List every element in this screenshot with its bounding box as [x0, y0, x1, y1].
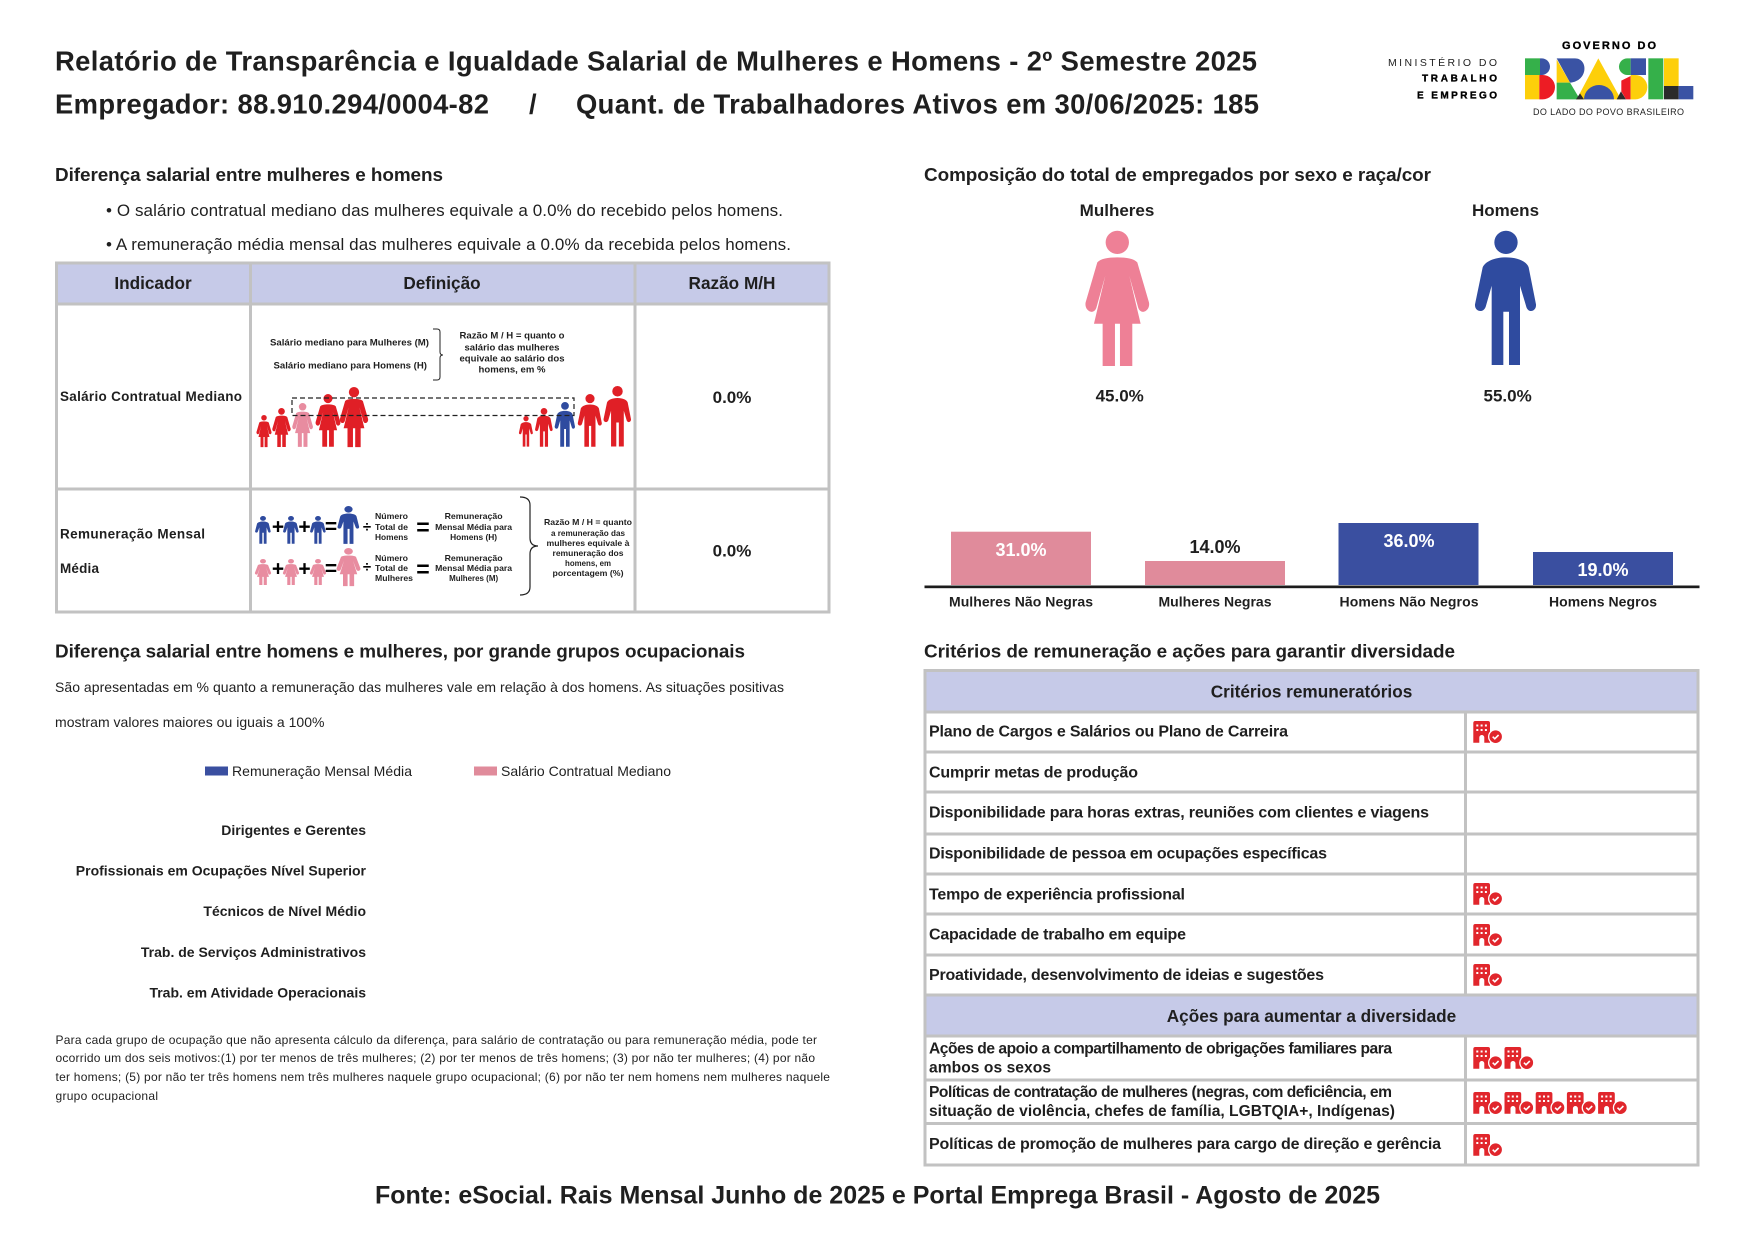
row: disponibilidade pessoa: Disponibilidade de pessoa em ocupações específicas [929, 846, 1327, 862]
footnote: Para cada grupo de ocupação que não apresenta cálculo da diferença, para salário de contratação ou para remuneração média, pode ter [56, 1033, 817, 1047]
category labels: Técnicos de Nível Médio [203, 903, 366, 919]
logo: ministério do trabalho e emprego [1388, 56, 1497, 102]
row: capacidade [925, 914, 1698, 955]
row: políticas de promoção [925, 1124, 1698, 1165]
table header: ações: Ações para aumentar a diversidade [1167, 1006, 1456, 1026]
figure: homens: Homens [1472, 201, 1539, 220]
panel: critérios de remuneração [924, 642, 1698, 1165]
diagram: remuneração média: Razão M / H = quanto [544, 517, 632, 527]
legend [205, 763, 671, 779]
logo: governo do brasil: DO LADO DO POVO BRASILEIRO [1533, 107, 1684, 117]
category labels: Trab. de Serviços Administrativos [141, 944, 366, 960]
table header: Indicador [114, 273, 192, 293]
diagram: salário mediano: homens, em % [478, 364, 546, 376]
diagram: remuneração média: = [325, 558, 337, 580]
diagram: salário mediano: salário das mulheres [464, 342, 560, 354]
row: ações de apoio: ambos os sexos [929, 1060, 1051, 1076]
row: cumprir metas [925, 752, 1698, 792]
figure: homens: 55.0% [1483, 386, 1532, 406]
row: plano de cargos [925, 712, 1698, 752]
panel: diferença salarial [55, 165, 829, 612]
footnote: grupo ocupacional [56, 1089, 158, 1103]
row: ações de apoio: Ações de apoio a compartilhamento de obrigações familiares para [929, 1040, 1392, 1058]
diagram: remuneração média [255, 497, 632, 595]
heading: critérios: Critérios de remuneração e ações para garantir diversidade [924, 642, 1455, 662]
heading: grupos ocupacionais: Diferença salarial entre homens e mulheres, por grande grupos ocupacionais [55, 642, 745, 662]
diagram: remuneração média: + [272, 516, 284, 538]
row: tempo de experiência: Tempo de experiência profissional [929, 886, 1185, 904]
description text [55, 679, 784, 730]
description text: mostram valores maiores ou iguais a 100% [55, 714, 324, 730]
bullet texts [106, 201, 791, 254]
row: políticas de contratação: Políticas de contratação de mulheres (negras, com deficiência, em [929, 1084, 1392, 1101]
diagram: remuneração média: Número [375, 511, 408, 521]
row: capacidade: Capacidade de trabalho em equipe [929, 926, 1186, 944]
diagram: remuneração média: Mulheres [375, 573, 413, 583]
heading: diferença salarial: Diferença salarial entre mulheres e homens [55, 165, 443, 186]
logo: ministério do trabalho e emprego: TRABALHO [1422, 74, 1497, 84]
panel: grupos ocupacionais [55, 642, 830, 1103]
diagram: remuneração média: Mensal Média para [435, 522, 512, 532]
diagram: remuneração média: Remuneração [445, 553, 503, 563]
category labels: Trab. em Atividade Operacionais [149, 984, 366, 1000]
diagram: remuneração média: porcentagem (%) [552, 568, 624, 578]
category labels: Dirigentes e Gerentes [221, 822, 366, 838]
table header: critérios remuneratórios [925, 670, 1698, 712]
legend: Salário Contratual Mediano [501, 763, 671, 779]
table header: Definição [403, 273, 481, 293]
row: tempo de experiência [925, 874, 1698, 914]
figure: homens [1472, 201, 1539, 406]
row: remuneração mensal média [56, 489, 829, 612]
bar chart: sexo e raça/cor [924, 523, 1700, 610]
diagram: remuneração média: remuneração dos [552, 548, 624, 558]
diagram: remuneração média: Total de [375, 522, 408, 532]
diagram: salário mediano: Razão M / H = quanto o [460, 330, 565, 342]
row: disponibilidade horas extras: Disponibilidade para horas extras, reuniões com clientes e viagens [929, 804, 1429, 822]
title: / [529, 89, 537, 120]
diagram: remuneração média: Número [375, 553, 408, 563]
logo: ministério do trabalho e emprego: E EMPREGO [1417, 90, 1497, 102]
row: salário contratual mediano: Salário Contratual Mediano [60, 389, 242, 404]
table: indicadores [56, 263, 829, 612]
diagram: salário mediano [256, 329, 631, 447]
row: ações de apoio [925, 1036, 1698, 1080]
footnote: ter homens; (5) por não ter três homens nem três mulheres naquele grupo ocupacional; (6) por não ter nem homens nem mulheres naquele [56, 1070, 830, 1084]
title: Quant. de Trabalhadores Ativos em 30/06/2025: 185 [576, 89, 1259, 120]
row: disponibilidade horas extras [925, 792, 1698, 834]
diagram: remuneração média: Homens [375, 532, 408, 542]
diagram: salário mediano: Salário mediano para Homens (H) [274, 360, 427, 372]
table header: Razão M/H [689, 273, 775, 293]
bar chart: sexo e raça/cor: Homens Não Negros [1340, 594, 1479, 610]
diagram: remuneração média: + [298, 516, 311, 538]
diagram: remuneração média: = [416, 514, 430, 540]
diagram: remuneração média: ÷ [363, 558, 371, 576]
diagram: remuneração média: Homens (H) [450, 532, 497, 542]
footnote [56, 1033, 830, 1103]
footnote: ocorrido um dos seis motivos:(1) por ter menos de três mulheres; (2) por ter menos de três homens; (3) por não ter mulheres; (4) por não [56, 1051, 815, 1065]
bar chart: sexo e raça/cor: Mulheres Não Negras [949, 594, 1093, 610]
figure: mulheres [1080, 201, 1154, 406]
title [55, 46, 1259, 120]
title: Relatório de Transparência e Igualdade Salarial de Mulheres e Homens - 2º Semestre 2025 [55, 46, 1257, 76]
legend: Remuneração Mensal Média [232, 763, 412, 779]
bar chart: sexo e raça/cor: 14.0% [1189, 537, 1241, 557]
diagram: remuneração média: + [298, 558, 311, 580]
figure: mulheres: 45.0% [1096, 386, 1144, 406]
row: políticas de contratação: situação de violência, chefes de família, LGBTQIA+, Indígenas) [929, 1103, 1395, 1120]
row: cumprir metas: Cumprir metas de produção [929, 764, 1138, 782]
diagram: remuneração média: Mulheres (M) [449, 573, 498, 583]
logo: ministério do trabalho e emprego: MINISTÉRIO DO [1388, 56, 1497, 69]
diagram: remuneração média: Remuneração [445, 511, 503, 521]
row: proatividade [925, 955, 1698, 995]
bullet texts: • O salário contratual mediano das mulheres equivale a 0.0% do recebido pelos homens. [106, 201, 783, 220]
bullet texts: • A remuneração média mensal das mulheres equivale a 0.0% da recebida pelos homens. [106, 235, 791, 254]
heading: composição: Composição do total de empregados por sexo e raça/cor [924, 165, 1432, 186]
diagram: salário mediano: equivale ao salário dos [460, 354, 564, 364]
table: critérios remuneratórios [925, 670, 1698, 1165]
panel: composição do total de empregados [924, 165, 1700, 610]
row: proatividade: Proatividade, desenvolvimento de ideias e sugestões [929, 967, 1324, 984]
logo: governo do brasil [1525, 40, 1693, 117]
row: políticas de contratação [925, 1080, 1698, 1124]
row: plano de cargos: Plano de Cargos e Salários ou Plano de Carreira [929, 724, 1288, 740]
logo: governo do brasil: GOVERNO DO [1562, 40, 1656, 52]
description text: São apresentadas em % quanto a remuneração das mulheres vale em relação à dos homens. As situações positivas [55, 679, 784, 695]
diagram: remuneração média: + [272, 558, 284, 580]
diagram: remuneração média: homens, em [565, 558, 611, 568]
diagram: remuneração média: ÷ [363, 518, 371, 536]
bar chart: sexo e raça/cor: 31.0% [995, 540, 1047, 560]
diagram: remuneração média: mulheres equivale à [546, 538, 630, 548]
bar chart: sexo e raça/cor: 19.0% [1577, 560, 1629, 580]
row: remuneração mensal média: Média [60, 561, 99, 576]
row: remuneração mensal média: 0.0% [713, 542, 751, 560]
diagram: remuneração média: = [325, 516, 337, 538]
bar chart: sexo e raça/cor: Homens Negros [1549, 594, 1657, 610]
table header: critérios remuneratórios: Critérios remuneratórios [1211, 682, 1412, 702]
bar chart: sexo e raça/cor: Mulheres Negras [1158, 594, 1272, 610]
table header [56, 263, 829, 304]
bar chart: sexo e raça/cor: 36.0% [1383, 531, 1435, 551]
diagram: remuneração média: Total de [375, 563, 408, 573]
diagram: remuneração média: Mensal Média para [435, 563, 512, 573]
figure: mulheres: Mulheres [1080, 201, 1154, 220]
table header: ações [925, 995, 1698, 1036]
row: remuneração mensal média: Remuneração Mensal [60, 526, 205, 542]
diagram: remuneração média: = [416, 556, 430, 582]
title: Empregador: 88.910.294/0004-82 [55, 89, 489, 120]
diagram: salário mediano: Salário mediano para Mulheres (M) [270, 338, 429, 348]
category labels [76, 822, 367, 1000]
row: salário contratual mediano [56, 304, 829, 489]
diagram: remuneração média: a remuneração das [551, 528, 625, 538]
row: políticas de promoção: Políticas de promoção de mulheres para cargo de direção e gerência [929, 1136, 1441, 1153]
category labels: Profissionais em Ocupações Nível Superior [76, 863, 367, 879]
source line: Fonte: eSocial. Rais Mensal Junho de 2025 e Portal Emprega Brasil - Agosto de 2025 [375, 1182, 1380, 1210]
row: disponibilidade pessoa [925, 834, 1698, 874]
row: salário contratual mediano: 0.0% [713, 388, 751, 407]
